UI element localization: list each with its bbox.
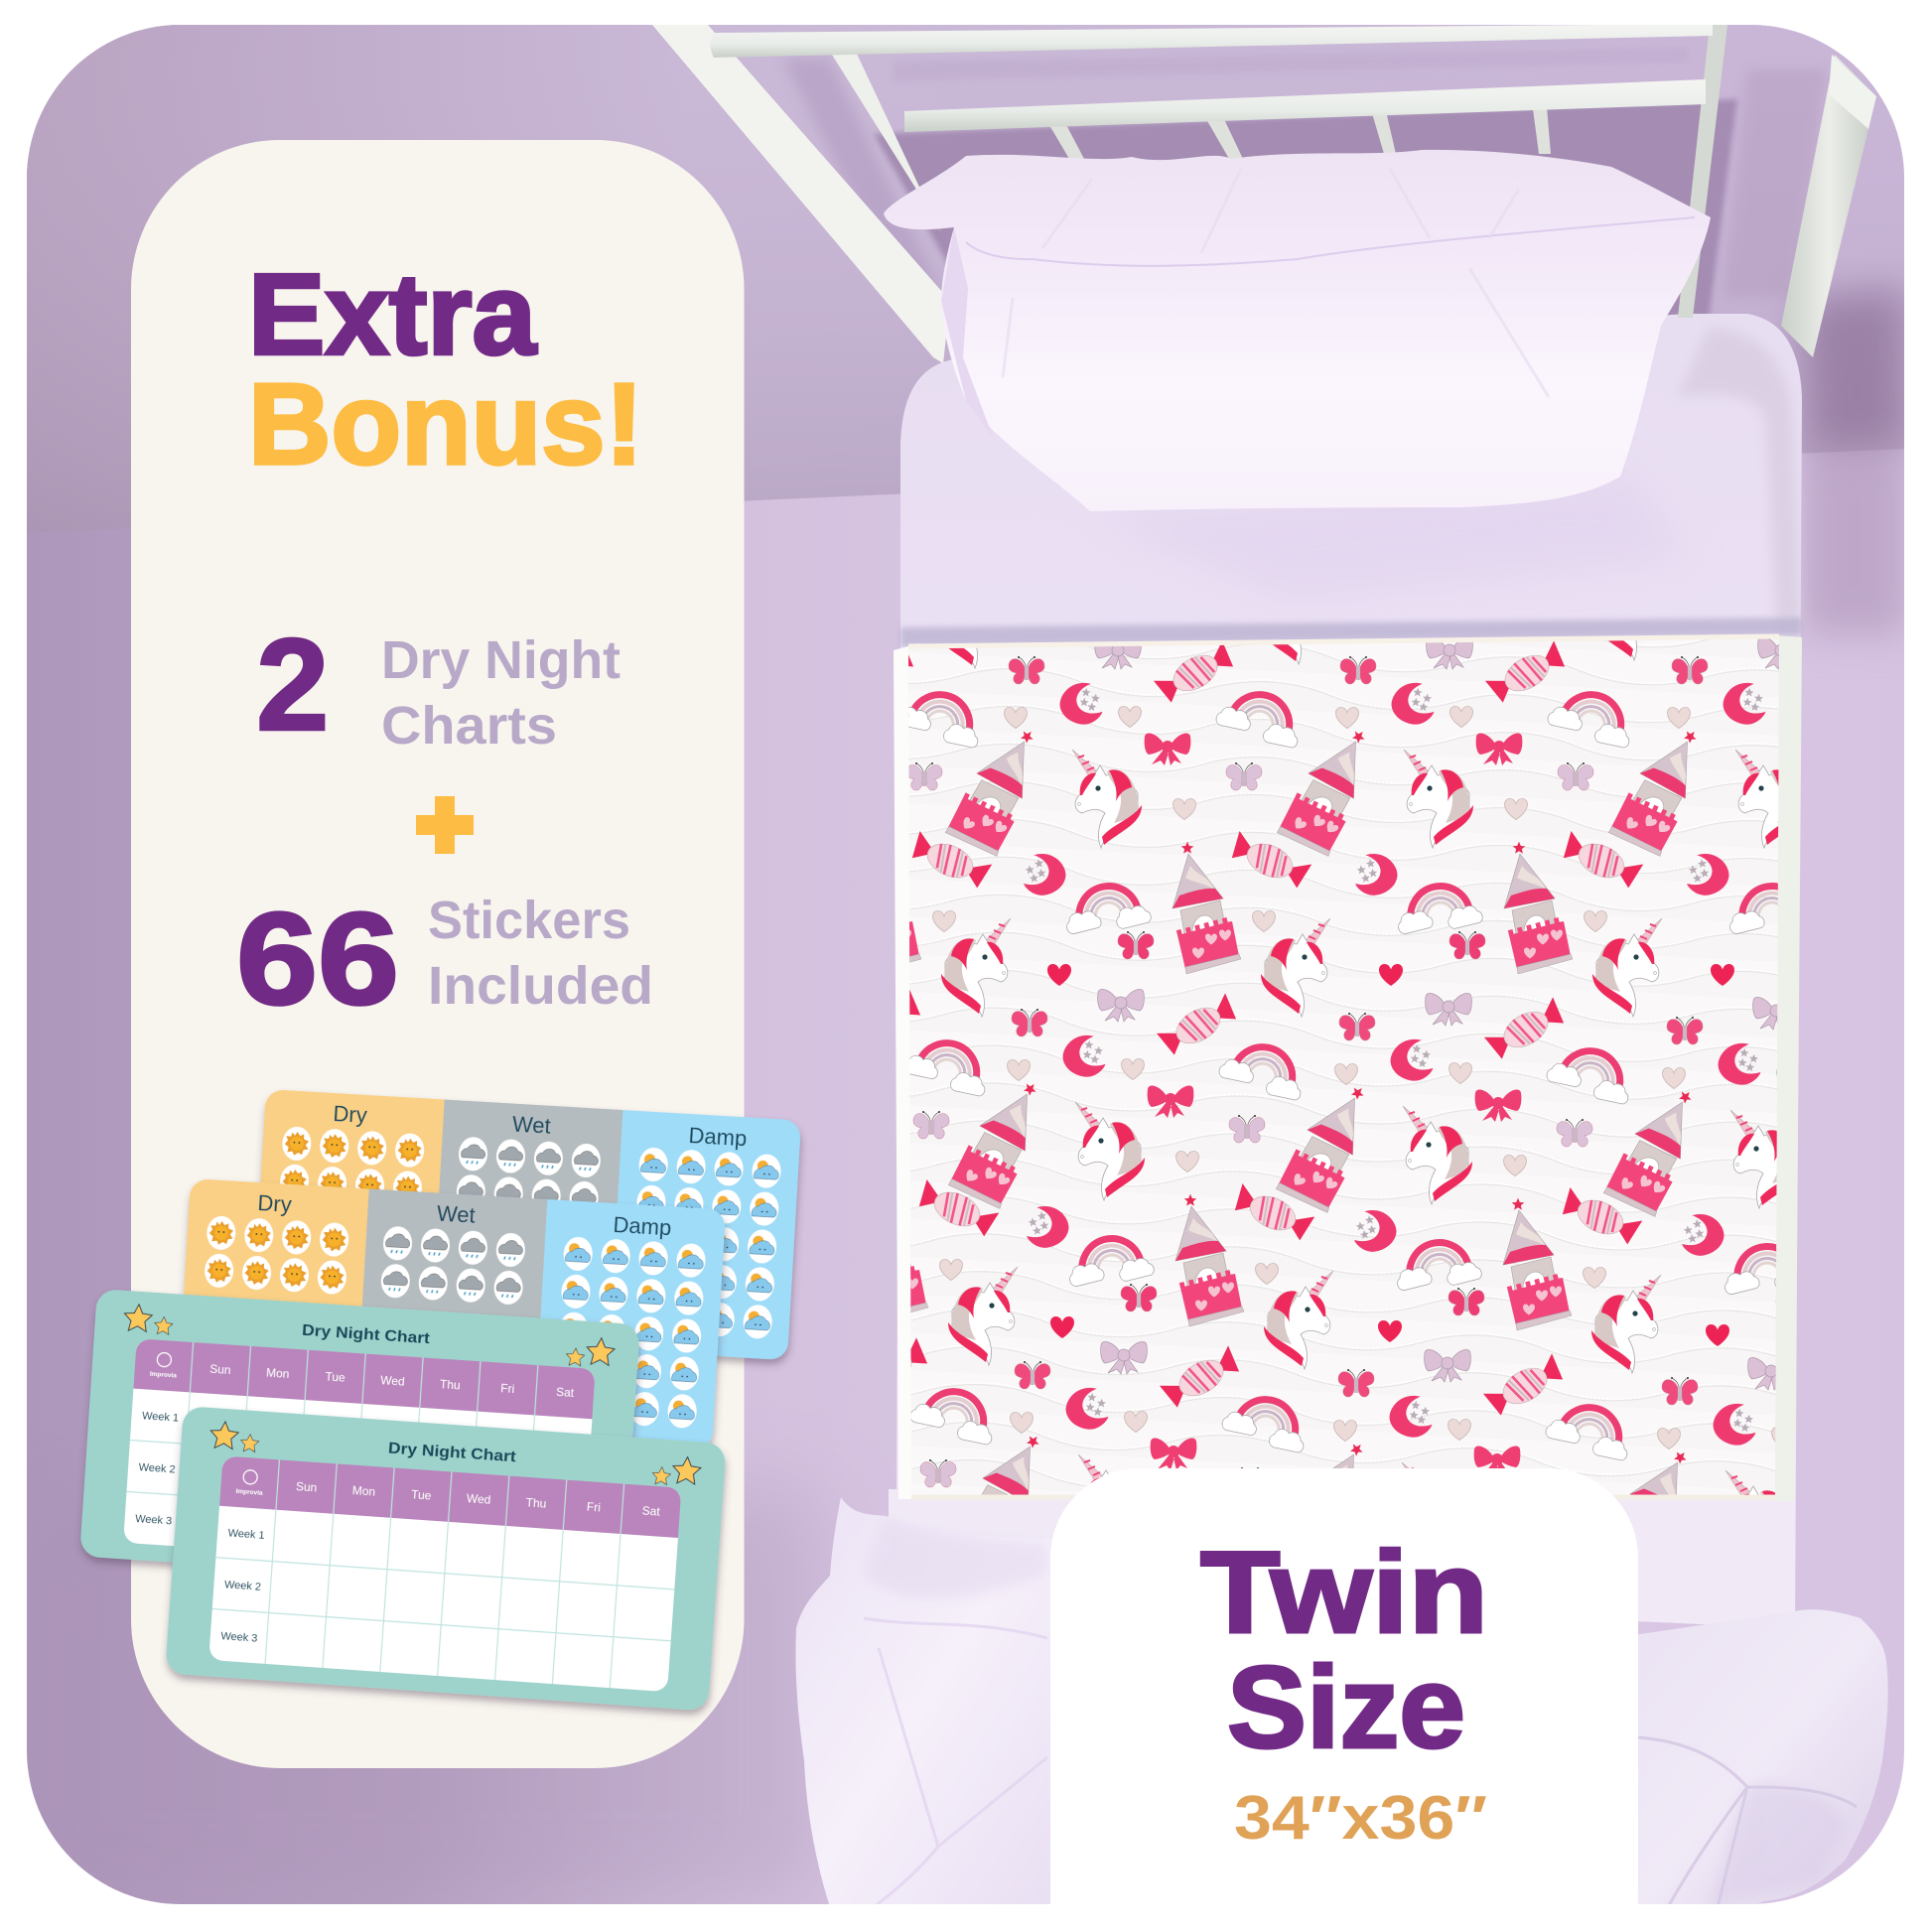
shadow on the wall right of the bed (1802, 288, 1907, 455)
right comforter (1633, 1609, 1888, 1907)
dry night chart: front: Mon (351, 1483, 376, 1499)
heading: Extra Bonus: Bonus! (248, 359, 643, 488)
dry night chart: front: Week 3 (220, 1630, 258, 1645)
stat: 2 dry night charts: 2 (256, 612, 329, 758)
dry night chart: back (79, 1289, 640, 1592)
dry night chart: back: Thu (440, 1377, 461, 1392)
dry night chart: front: Sun (295, 1479, 318, 1495)
sheet wrinkle shadow under pillow (1213, 506, 1634, 573)
stat: 2 dry night charts: Dry Night (381, 630, 621, 690)
sticker sheet: front: Damp (613, 1212, 672, 1240)
title: Twin Size: Size (1227, 1642, 1465, 1772)
dry night chart: front: Week 1 (227, 1527, 265, 1542)
dry night chart: back: Sun (209, 1362, 231, 1377)
dry night chart: back: Dry Night Chart (302, 1322, 431, 1347)
dimensions: 34″x36″ (1234, 1784, 1487, 1853)
shadow of the headboard on the wall (874, 97, 1739, 316)
sticker sheet: back: Wet (511, 1112, 551, 1139)
stat: 66 stickers included: Stickers (428, 891, 630, 950)
dry night chart: front: Thu (525, 1495, 547, 1511)
dry night chart: back: Sat (556, 1385, 575, 1400)
sticker sheet: front: Dry (257, 1190, 292, 1217)
panel: extra bonus (131, 140, 745, 1768)
stat: 66 stickers included: Included (428, 956, 653, 1016)
dry night chart: back: Week 3 (135, 1513, 173, 1527)
wall behind the bed (27, 25, 1907, 533)
dry night chart: back: Fri (500, 1381, 515, 1396)
stat: 66 stickers included (236, 886, 653, 1032)
icon: plus (416, 796, 474, 854)
sticker sheet: front: Wet (436, 1201, 476, 1228)
floor shading at the lower left (27, 1489, 821, 1907)
pillow (884, 150, 1711, 511)
sticker sheet: back (252, 1089, 801, 1360)
dry night chart: back: Wed (380, 1373, 405, 1389)
dry night chart: back: Week 1 (142, 1410, 179, 1425)
title: Twin Size: Twin (1200, 1527, 1488, 1657)
sticker sheet: back: Damp (688, 1123, 748, 1151)
bed mattress with fitted sheet (889, 314, 1802, 1628)
left comforter (795, 1497, 1052, 1907)
dry night chart: front: Wed (466, 1491, 491, 1507)
stat: 2 dry night charts (256, 612, 621, 758)
dry night chart: front: Tue (411, 1487, 432, 1503)
dry night chart: back: Tue (325, 1369, 346, 1385)
sticker sheet: back: Dry (333, 1101, 367, 1128)
dry night chart: back: Improvia (150, 1371, 178, 1380)
dry night chart: back: Week 2 (138, 1461, 176, 1476)
dry night chart: front (165, 1406, 727, 1712)
dry night chart: front: Week 2 (224, 1579, 261, 1593)
dry night chart: back: Mon (266, 1365, 290, 1381)
dry night chart: front: Sat (641, 1503, 661, 1519)
stat: 66 stickers included: 66 (236, 886, 399, 1032)
heading: Extra Bonus: Extra (248, 250, 537, 379)
dry night chart: front: Dry Night Chart (387, 1440, 517, 1466)
heading: Extra Bonus (248, 250, 643, 488)
dry night chart: front: Fri (586, 1500, 601, 1515)
mattress side shading (1684, 330, 1801, 619)
stat: 2 dry night charts: Charts (381, 696, 557, 756)
headboard frame (652, 24, 1876, 363)
title: Twin Size (1200, 1527, 1488, 1772)
sticker sheet: front (177, 1178, 726, 1449)
panel: twin size callout (1050, 1468, 1638, 1904)
white lower sheet below pad (889, 1489, 1701, 1624)
dry night chart: front: Improvia (235, 1488, 263, 1497)
waterproof pad with unicorn print (894, 633, 1802, 1501)
pad print motifs (609, 276, 1932, 1737)
